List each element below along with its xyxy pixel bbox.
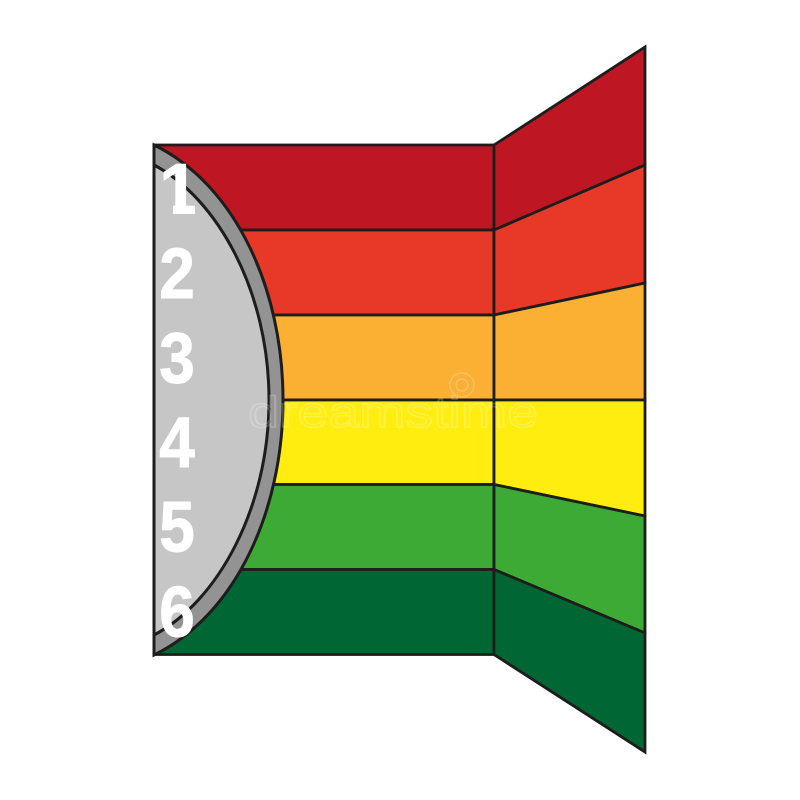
step numbers 1 to 6: 6 — [159, 573, 195, 652]
panel: left wall colour bands — [154, 145, 494, 654]
step numbers 1 to 6 — [160, 164, 195, 638]
panel: right wall colour bands — [494, 47, 645, 752]
step numbers 1 to 6: 4 — [159, 404, 195, 483]
door: outer grey rim — [154, 145, 283, 655]
infographic: six-band folded panel with door — [152, 44, 646, 755]
step numbers 1 to 6: 1 — [159, 150, 199, 230]
watermark: dreamstime — [248, 388, 538, 437]
door: inner light grey face — [154, 165, 269, 635]
step numbers 1 to 6: 5 — [159, 488, 195, 567]
step numbers 1 to 6: 2 — [159, 235, 195, 314]
step numbers 1 to 6: 3 — [159, 319, 195, 398]
watermark — [248, 373, 538, 437]
